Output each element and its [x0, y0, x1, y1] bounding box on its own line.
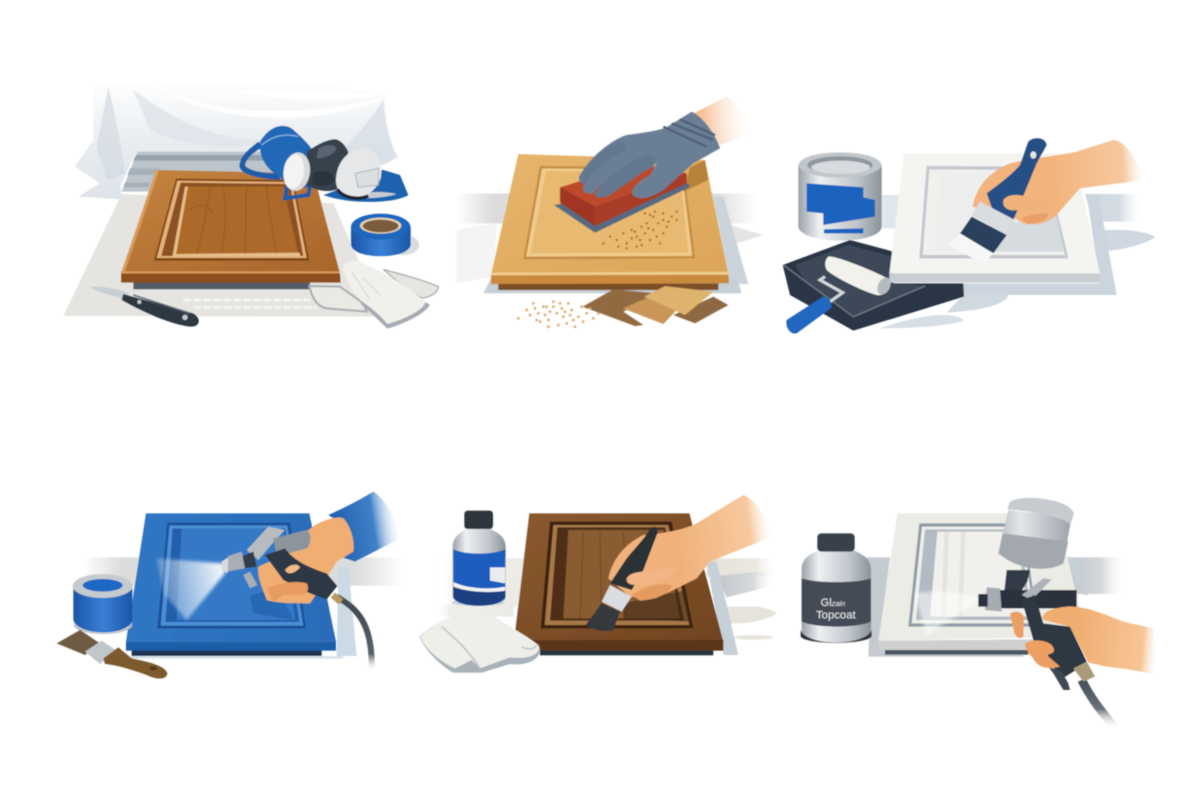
panel: step 2 sanding	[457, 97, 763, 327]
topcoat can	[801, 533, 872, 643]
wall molding	[122, 152, 280, 192]
cabinet door: sanded pine	[491, 154, 729, 290]
rag	[419, 612, 540, 673]
spray gun	[978, 498, 1095, 690]
label text: zain	[831, 599, 845, 608]
paint brush	[57, 630, 167, 679]
sanding dust on door	[603, 212, 677, 248]
work surface	[433, 558, 777, 655]
stained door	[514, 513, 723, 651]
sleeve	[328, 492, 400, 562]
gloved hand	[578, 97, 753, 198]
hose	[337, 597, 372, 672]
sandpaper sheets	[583, 286, 728, 326]
roller tray	[783, 240, 964, 331]
panel: step 6 topcoat	[801, 498, 1157, 728]
sawdust pile	[518, 302, 598, 327]
drop paper	[63, 194, 383, 317]
paint can	[798, 152, 882, 241]
work surface	[83, 557, 403, 659]
mist	[915, 592, 980, 637]
hand and spray gun	[222, 517, 354, 605]
panel: step 4 spray blue paint	[57, 492, 403, 679]
work surface	[457, 193, 763, 293]
paint roller	[786, 257, 893, 334]
roll of blue tape	[351, 214, 419, 256]
plastic sheeting	[75, 79, 398, 199]
panel: step 1 preparation	[63, 79, 438, 329]
label text: Gl	[821, 597, 832, 609]
panel: step 3 priming	[783, 138, 1155, 334]
tape	[73, 574, 133, 634]
panel: step 5 glaze	[419, 495, 777, 673]
work surface	[862, 557, 1125, 657]
shadows on surface	[788, 194, 1155, 328]
primed white door	[889, 153, 1100, 283]
spray fan	[157, 558, 225, 620]
hand with brush	[586, 495, 772, 631]
respirator mask	[239, 126, 408, 202]
cabinet door: wood	[121, 170, 341, 289]
white glazed door	[878, 513, 1087, 650]
blue door	[126, 513, 336, 651]
stain bottle	[452, 511, 506, 606]
white gloves	[309, 261, 438, 329]
label text: Topcoat	[816, 609, 857, 621]
putty knife	[89, 287, 199, 327]
hose	[1082, 680, 1115, 728]
sanding block	[554, 163, 689, 233]
hand gripping gun	[1010, 606, 1157, 675]
hand with brush	[948, 138, 1143, 264]
